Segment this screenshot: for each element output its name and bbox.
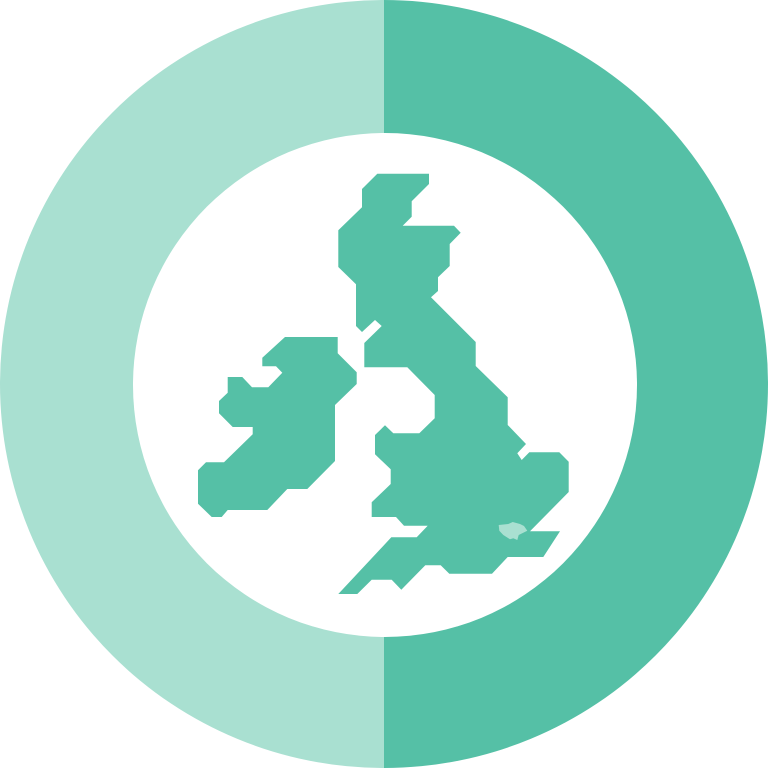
map: British Isles [198,174,569,594]
map: Great Britain [338,174,569,594]
map: London highlight [499,522,527,540]
ring segment: left half, light [0,0,384,768]
map: Ireland [198,337,357,517]
ring centre: white disc [133,133,637,637]
ring segment: right half, dark [384,0,768,768]
